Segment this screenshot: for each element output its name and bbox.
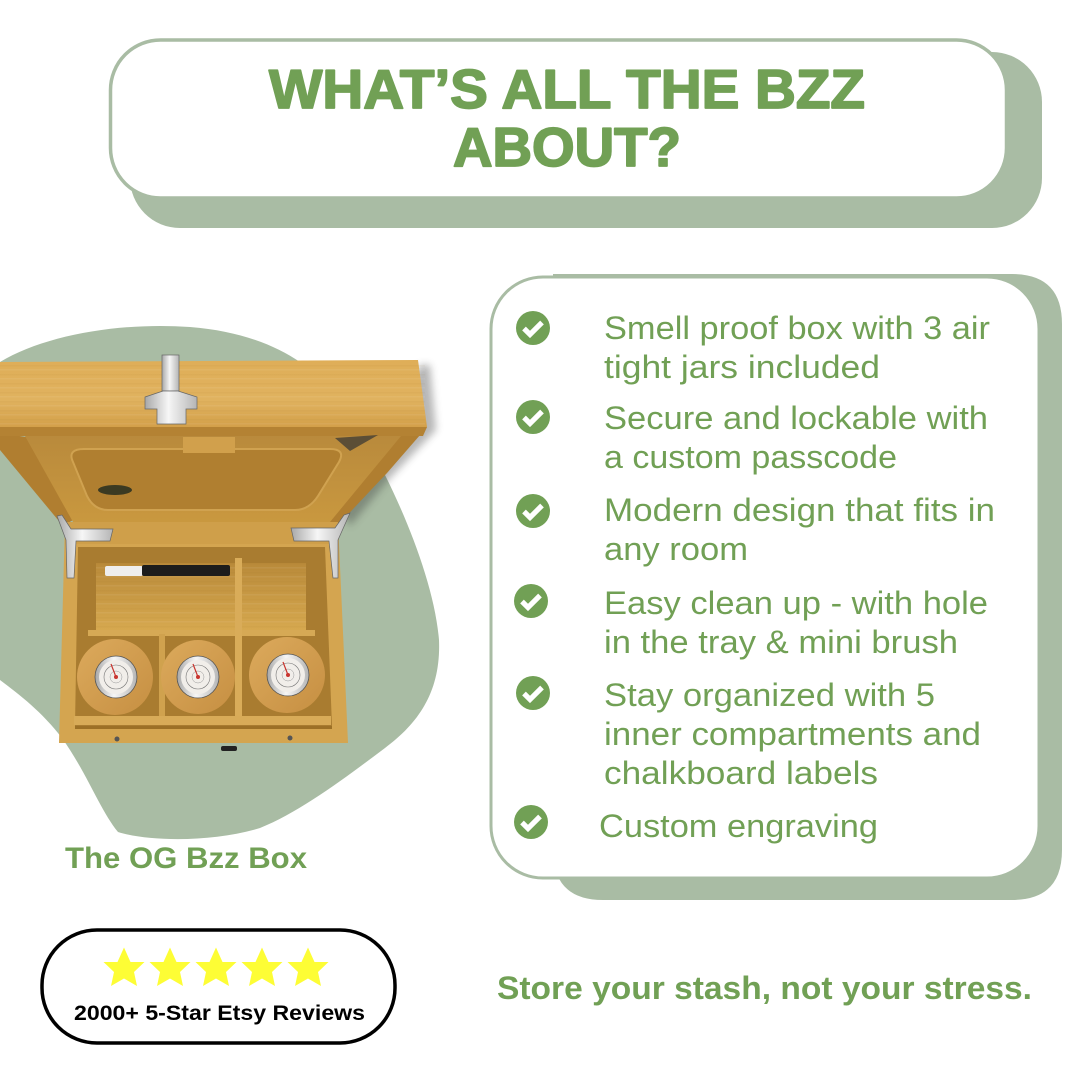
feature: engraving: Custom engraving: [599, 808, 878, 844]
box lid: [0, 360, 427, 526]
features panel: [491, 274, 1062, 900]
five stars: [104, 948, 328, 986]
metal clasp and hinges: [57, 355, 350, 578]
feature: compartments: chalkboard labels: [604, 755, 878, 791]
feature: engraving: [514, 805, 878, 844]
reviews badge: [42, 930, 395, 1043]
product caption: The OG Bzz Box: [65, 842, 307, 875]
box base: [59, 522, 348, 751]
feature: easy clean up: in the tray & mini brush: [604, 624, 958, 660]
chalk marker: [105, 565, 230, 576]
feature: compartments: Stay organized with 5: [604, 677, 935, 713]
box shadow: [340, 365, 436, 526]
title heading: WHAT’S ALL THE BZZ: [269, 58, 865, 120]
feature: lockable: Secure and lockable with: [604, 400, 988, 436]
title panel: [110, 40, 1042, 228]
feature: compartments: inner compartments and: [604, 716, 981, 752]
feature: lockable: [516, 400, 988, 475]
three jars with gauges: [77, 637, 325, 715]
feature: smell proof: [516, 310, 990, 385]
feature: easy clean up: Easy clean up - with hole: [604, 585, 988, 621]
feature: modern design: Modern design that fits in: [604, 492, 995, 528]
feature: modern design: [516, 492, 995, 567]
feature: smell proof: Smell proof box with 3 air: [604, 310, 990, 346]
tagline: Store your stash, not your stress.: [497, 970, 1032, 1006]
feature: smell proof: tight jars included: [604, 349, 880, 385]
title heading: ABOUT?: [453, 116, 681, 178]
feature: easy clean up: [514, 584, 988, 660]
product photo: open bamboo box: [0, 355, 436, 751]
reviews text: 2000+ 5-Star Etsy Reviews: [74, 1002, 365, 1025]
feature: modern design: any room: [604, 531, 748, 567]
feature: lockable: a custom passcode: [604, 439, 897, 475]
feature: compartments: [516, 676, 981, 791]
green blob background: [0, 326, 439, 839]
title heading: [269, 58, 865, 178]
